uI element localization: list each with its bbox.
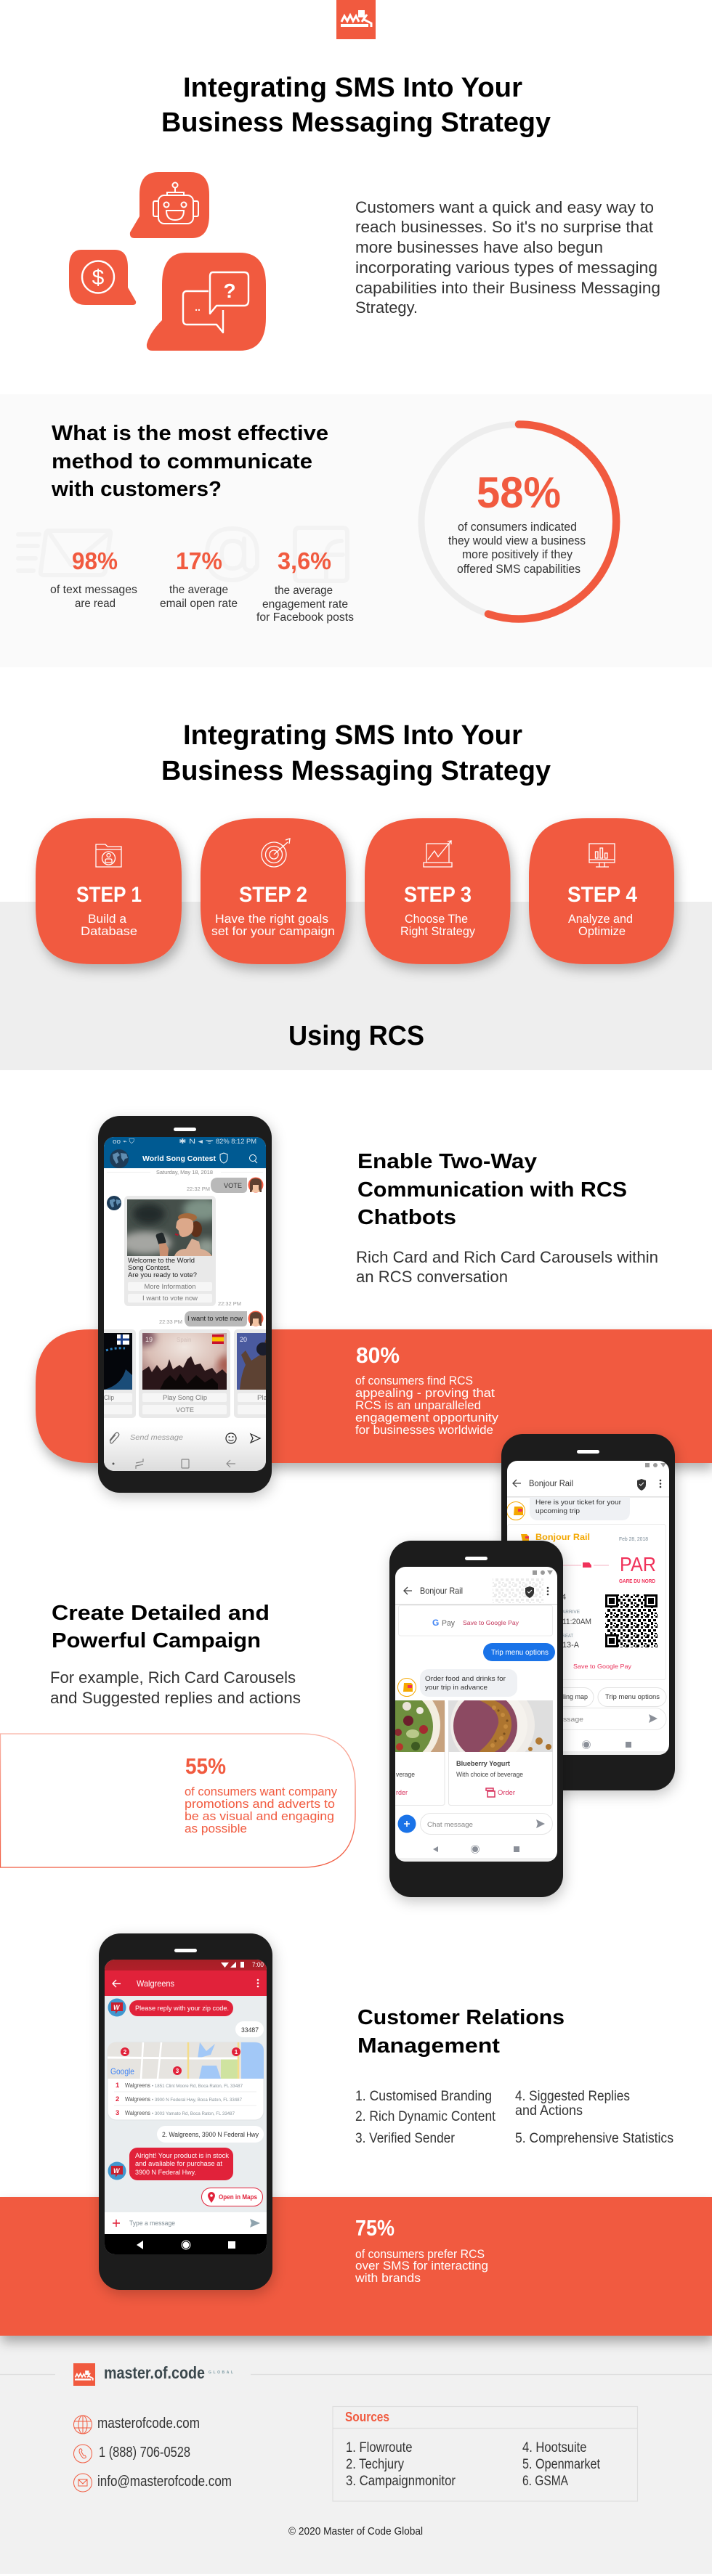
store list: • 1851 Clint Moore Rd, Boca Raton, FL 33487 (152, 2084, 243, 2089)
phone: world song contest (94, 1116, 278, 1493)
boarding pass: 4 (562, 1593, 566, 1602)
boarding pass: ARRIVE (562, 1610, 580, 1615)
status bar: 82% 8:12 PM (216, 1138, 256, 1146)
carousel cards: Play Song Clip (163, 1394, 207, 1401)
boarding pass: 11:20AM (562, 1618, 591, 1626)
phone: bonjour rail food order (356, 1541, 563, 1897)
step 2 card (201, 818, 346, 964)
bot message: in stock (108, 2148, 233, 2180)
callout: 55% stat: 55% (185, 1753, 226, 1779)
user message: zip (235, 2021, 264, 2037)
step 3 card: STEP 3 (404, 883, 472, 907)
stat: 98%: are read (75, 598, 116, 610)
intro paragraph (355, 198, 660, 317)
phone: world song contest: Saturday, May 18, 2018 (156, 1169, 213, 1175)
status icons (533, 1570, 553, 1575)
stat: 75%: with brands (355, 2271, 421, 2285)
boarding pass: PAR (620, 1553, 656, 1576)
step 3 card: Right Strategy (400, 924, 475, 938)
stat: 80%: for businesses worldwide (355, 1423, 493, 1437)
icon: question bubble: ? (223, 280, 236, 302)
sources box: 5. Openmarket (522, 2457, 601, 2472)
map: 3 (176, 2068, 179, 2074)
suggested chips: Trip menu options (605, 1693, 660, 1700)
intro paragraph: incorporating various types of messaging (355, 258, 658, 277)
status icons (645, 1463, 666, 1467)
status bar (221, 1961, 264, 1968)
step 1 card: STEP 1 (76, 883, 142, 907)
sources box: 6. GSMA (522, 2474, 568, 2489)
footer background (0, 2336, 712, 2574)
carousel cards: Clip (104, 1394, 114, 1401)
stat: 75%: over SMS for interacting (355, 2259, 488, 2273)
status bar: ✱ N ◂ ᯤ (179, 1138, 214, 1146)
band: 75% stat background (0, 2197, 712, 2336)
stat: 75% (355, 2215, 488, 2285)
status bar (113, 1138, 256, 1144)
step 1 card: Database (81, 924, 137, 938)
donut chart: 58%: 58% (477, 468, 561, 517)
stat: 3,6%: 3,6% (278, 547, 331, 574)
icon: robot bubble (130, 172, 209, 238)
step 1 card (36, 818, 182, 964)
food card: blueberry yogurt: Blueberry Yogurt (456, 1760, 511, 1768)
step 3 card (365, 818, 510, 964)
user message: store choice: 2. Walgreens, 3900 N Federal Hwy (162, 2131, 259, 2139)
sources box: 1. Flowroute (346, 2440, 413, 2455)
step 2 card: STEP 2 (239, 883, 307, 907)
section text: customer relations: 5. Comprehensive Statistics (515, 2130, 673, 2146)
google pay card: G (432, 1618, 439, 1628)
bot message: in stock: 3900 N Federal Hwy. (135, 2169, 196, 2177)
store list: • 3003 Yamato Rd, Boca Raton, FL 33487 (152, 2111, 235, 2116)
chat input: ssage (563, 1716, 583, 1724)
message bubble: Here is your ticket for your (535, 1499, 621, 1507)
donut chart: 58%: offered SMS capabilities (457, 563, 580, 576)
heading: integrating strategy (161, 720, 551, 786)
contact: phone (74, 2445, 190, 2463)
button: open in maps (202, 2188, 263, 2206)
donut chart: 58% (421, 424, 616, 619)
boarding pass: Feb 28, 2018 (619, 1537, 648, 1542)
stat: 3,6%: for Facebook posts (256, 611, 354, 624)
step 4 card (529, 818, 674, 964)
sources box: 4. Hootsuite (522, 2440, 587, 2455)
footer (0, 2363, 712, 2538)
boarding pass (507, 1525, 666, 1680)
stat: 3,6% (256, 547, 354, 624)
food card: blueberry yogurt: Order (498, 1789, 515, 1797)
heading: most effective method: What is the most effective (52, 422, 328, 445)
status bar: oo ⌁ ⛉ (113, 1138, 135, 1146)
donut chart: 58%: they would view a business (448, 534, 586, 547)
stat: 80%: RCS is an unparalleled (355, 1398, 481, 1412)
step 4 card: Analyze and (568, 912, 633, 926)
footer brand: GLOBAL (209, 2371, 233, 2375)
rich card: singer: 22:32 PM (218, 1300, 241, 1307)
icon: laptop chart (424, 841, 452, 867)
carousel cards (104, 1329, 266, 1418)
chat header: Bonjour Rail (529, 1478, 573, 1488)
carousel cards: Pla (257, 1394, 267, 1401)
stat: 17%: 17% (176, 547, 222, 574)
intro paragraph: capabilities into their Business Messaging (355, 279, 660, 297)
intro paragraph: reach businesses. So it's no surprise that (355, 218, 653, 236)
rich card: singer: Are you ready to vote? (128, 1271, 197, 1279)
app bar: Walgreens (137, 1978, 174, 1989)
stat: 17%: email open rate (160, 598, 238, 610)
stat: 3,6%: engagement rate (262, 598, 348, 611)
title: Business Messaging Strategy (161, 107, 551, 138)
band: 80% stat background (36, 1329, 712, 1463)
phone: bonjour rail ticket (501, 1434, 675, 1790)
google pay card: Pay (442, 1619, 455, 1628)
carousel cards: Spain (177, 1337, 191, 1343)
chat header: World Song Contest (142, 1154, 216, 1163)
bubble: order food: your trip in advance (425, 1684, 488, 1692)
section text: customer relations (355, 2006, 673, 2146)
bot message: in stock: W (113, 2167, 121, 2174)
chat header (395, 1586, 557, 1605)
stat: 80%: engagement opportunity (355, 1411, 499, 1424)
callout: 55% stat: as possible (185, 1822, 247, 1835)
section text: customer relations: 1. Customised Branding (355, 2088, 492, 2104)
store list: 1 (116, 2082, 120, 2090)
map: 2 (124, 2049, 127, 2055)
bubble: trip menu options (483, 1643, 555, 1661)
chat header (110, 1149, 257, 1168)
bot message: in stock: Alright! Your product is in stock (135, 2152, 229, 2160)
stat: 98%: 98% (72, 547, 118, 574)
carousel cards: 20 (240, 1336, 247, 1343)
food card: salad: rder (396, 1789, 408, 1796)
boarding pass: Bonjour Rail (535, 1532, 590, 1542)
title (161, 73, 551, 138)
icon group: chat bubbles (69, 172, 266, 351)
contact: website: masterofcode.com (97, 2416, 200, 2432)
heading: most effective method (51, 422, 328, 501)
QR code (605, 1594, 658, 1647)
boarding pass: Save to Google Pay (573, 1663, 632, 1670)
stat: 80%: 80% (356, 1342, 400, 1368)
step 2 card: Have the right goals (215, 912, 328, 926)
sources box: 2. Techjury (346, 2457, 404, 2472)
stat: 17%: the average (169, 584, 228, 596)
outgoing bubble: vote: 22:32 PM (187, 1186, 210, 1192)
message input (105, 2212, 267, 2234)
rich card: singer (107, 1196, 241, 1307)
icon: question bubble (147, 253, 266, 351)
message input and navigation (104, 1432, 266, 1471)
chat input (398, 1814, 552, 1834)
callout: 55% stat: promotions and adverts to (185, 1797, 335, 1811)
section text: customer relations: Customer Relations (357, 2006, 565, 2029)
chat input: Chat message (427, 1821, 473, 1829)
rich card: singer: More Information (144, 1283, 196, 1290)
food card: blueberry yogurt (448, 1683, 553, 1805)
stat: 80% (355, 1342, 499, 1437)
contact: email (74, 2474, 232, 2492)
navigation bar (105, 2234, 267, 2254)
bubble: trip menu options: Trip menu options (491, 1649, 549, 1657)
section text: two-way communication: an RCS conversation (356, 1268, 508, 1286)
panel: effectiveness stats (0, 394, 712, 667)
chat input (563, 1708, 667, 1755)
icon: question bubble: .. (195, 301, 201, 313)
outgoing bubble: want to vote (159, 1311, 263, 1326)
section text: detailed campaign: Create Detailed and (52, 1602, 270, 1625)
message input and navigation: Send message (130, 1434, 183, 1442)
stat: 3,6%: the average (275, 584, 333, 597)
rich card: singer: Welcome to the World (128, 1257, 195, 1265)
bubble: order food (398, 1669, 517, 1697)
map: 1 (235, 2049, 238, 2055)
stat: 75%: 75% (355, 2215, 395, 2241)
footer brand (0, 2363, 712, 2386)
heading: most effective method: with customers? (51, 478, 222, 501)
rich card: singer: Song Contest. (128, 1264, 171, 1272)
stat: 75%: of consumers prefer RCS (355, 2247, 485, 2261)
food card: salad: verage (396, 1771, 415, 1778)
button: open in maps: Open in Maps (219, 2193, 257, 2201)
icon: folder (96, 844, 121, 867)
chat header (507, 1478, 669, 1497)
section text: customer relations: 3. Verified Sender (355, 2130, 455, 2146)
icon: dollar bubble: $ (92, 266, 105, 290)
app bar (105, 1970, 267, 1996)
sources box: 3. Campaignmonitor (346, 2474, 456, 2489)
section text: two-way communication: Chatbots (357, 1206, 456, 1229)
outgoing bubble: vote (187, 1178, 263, 1193)
heading: integrating strategy: Integrating SMS Into Your (183, 720, 522, 751)
step 4 card: Optimize (578, 924, 626, 938)
boarding pass: GARE DU NORD (619, 1579, 655, 1584)
carousel cards: VOTE (176, 1406, 194, 1414)
store list: Walgreens (125, 2096, 150, 2103)
user message: store choice (157, 2126, 264, 2143)
intro paragraph: Strategy. (355, 298, 418, 317)
map: Google (110, 2066, 134, 2076)
icon: monitor chart (589, 844, 615, 867)
ghost icons (18, 528, 347, 581)
food card: blueberry yogurt: With choice of beverage (456, 1771, 523, 1778)
chat header: Bonjour Rail (420, 1586, 463, 1596)
donut chart: 58%: of consumers indicated (458, 521, 577, 534)
store locator card (108, 2042, 264, 2120)
store list: Walgreens (125, 2082, 150, 2089)
section text: customer relations: and Actions (515, 2103, 583, 2119)
food card: salad (356, 1683, 445, 1805)
callout: 55% stat: of consumers want company (185, 1785, 337, 1798)
bubble: order food: Order food and drinks for (425, 1675, 506, 1683)
footer brand: master.of.code (104, 2363, 205, 2382)
contact: website (74, 2416, 200, 2434)
bot message: in stock: and avaliable for purchase at (135, 2160, 222, 2168)
map (108, 2042, 264, 2079)
suggested chips (563, 1687, 667, 1707)
bot message: zip code: Please reply with your zip code. (135, 2005, 229, 2013)
sources box: Sources (345, 2410, 389, 2424)
callout: 55% stat (0, 1734, 355, 1867)
step 4 card: STEP 4 (567, 883, 637, 907)
intro paragraph: more businesses have also begun (355, 238, 603, 256)
carousel cards: 19 (145, 1336, 153, 1343)
section text: two-way communication: Rich Card and Rich Card Carousels within (356, 1248, 658, 1266)
boarding pass: 13-A (562, 1641, 580, 1650)
store list: 2 (116, 2095, 119, 2103)
panel: gray background (0, 902, 712, 1070)
bot message: zip code (108, 1998, 233, 2017)
status bar: 7:00 (252, 1961, 264, 1968)
suggested chips: ling map (563, 1693, 588, 1700)
sources box (333, 2406, 638, 2501)
heading: most effective method: method to communicate (52, 450, 312, 473)
navigation bar (433, 1846, 519, 1853)
contact: email: info@masterofcode.com (97, 2474, 232, 2490)
section text: two-way communication: Communication with RCS (357, 1178, 627, 1202)
step 2 card: set for your campaign (211, 924, 335, 938)
section text: two-way communication: Enable Two-Way (357, 1150, 537, 1173)
stat: 17% (160, 547, 238, 610)
icon: dollar bubble (69, 250, 136, 305)
section text: customer relations: 2. Rich Dynamic Content (355, 2108, 496, 2124)
boarding pass: SEAT (562, 1634, 573, 1639)
store list: 3 (116, 2109, 119, 2117)
store list (114, 2082, 256, 2117)
store list: Walgreens (125, 2110, 150, 2116)
phone: walgreens (99, 1933, 272, 2290)
store list: • 3900 N Federal Hwy, Boca Raton, FL 33487 (152, 2098, 242, 2103)
section text: detailed campaign: and Suggested replies and actions (50, 1689, 301, 1707)
bot message: zip code: W (113, 2004, 121, 2011)
message input: Type a message (129, 2220, 175, 2227)
callout: 55% stat: be as visual and engaging (185, 1809, 334, 1823)
rich card: singer: I want to vote now (142, 1295, 198, 1302)
section text: customer relations: Management (357, 2034, 500, 2058)
google pay card (398, 1605, 552, 1636)
section text: detailed campaign: For example, Rich Card Carousels (50, 1668, 296, 1687)
outgoing bubble: want to vote: 22:33 PM (159, 1318, 182, 1325)
outgoing bubble: vote: VOTE (224, 1182, 242, 1190)
google pay card: Save to Google Pay (463, 1619, 519, 1626)
stat: 98% (50, 547, 137, 610)
stat: 80%: of consumers find RCS (355, 1374, 473, 1387)
section text: two-way communication (356, 1150, 658, 1286)
user message: zip: 33487 (241, 2026, 259, 2034)
contact: phone: 1 (888) 706-0528 (99, 2445, 190, 2461)
donut chart: 58%: more positively if they (462, 548, 573, 561)
section text: detailed campaign (50, 1602, 301, 1707)
message bubble (507, 1497, 630, 1520)
heading: integrating strategy: Business Messaging Strategy (161, 756, 551, 786)
icon: target (262, 839, 290, 867)
stat: 80%: appealing - proving that (355, 1386, 495, 1400)
stat: 98%: of text messages (50, 584, 137, 596)
outgoing bubble: want to vote: I want to vote now (187, 1315, 243, 1322)
title: Integrating SMS Into Your (183, 73, 522, 103)
logo tab (336, 0, 376, 39)
ghost QR (493, 1578, 543, 1603)
step 3 card: Choose The (405, 912, 468, 926)
section text: customer relations: 4. Siggested Replies (515, 2088, 630, 2104)
section text: detailed campaign: Powerful Campaign (52, 1629, 261, 1652)
copyright: © 2020 Master of Code Global (288, 2525, 423, 2538)
intro paragraph: Customers want a quick and easy way to (355, 198, 654, 216)
step 1 card: Build a (88, 912, 127, 926)
message bubble: upcoming trip (535, 1507, 580, 1515)
heading: using RCS: Using RCS (288, 1021, 424, 1051)
